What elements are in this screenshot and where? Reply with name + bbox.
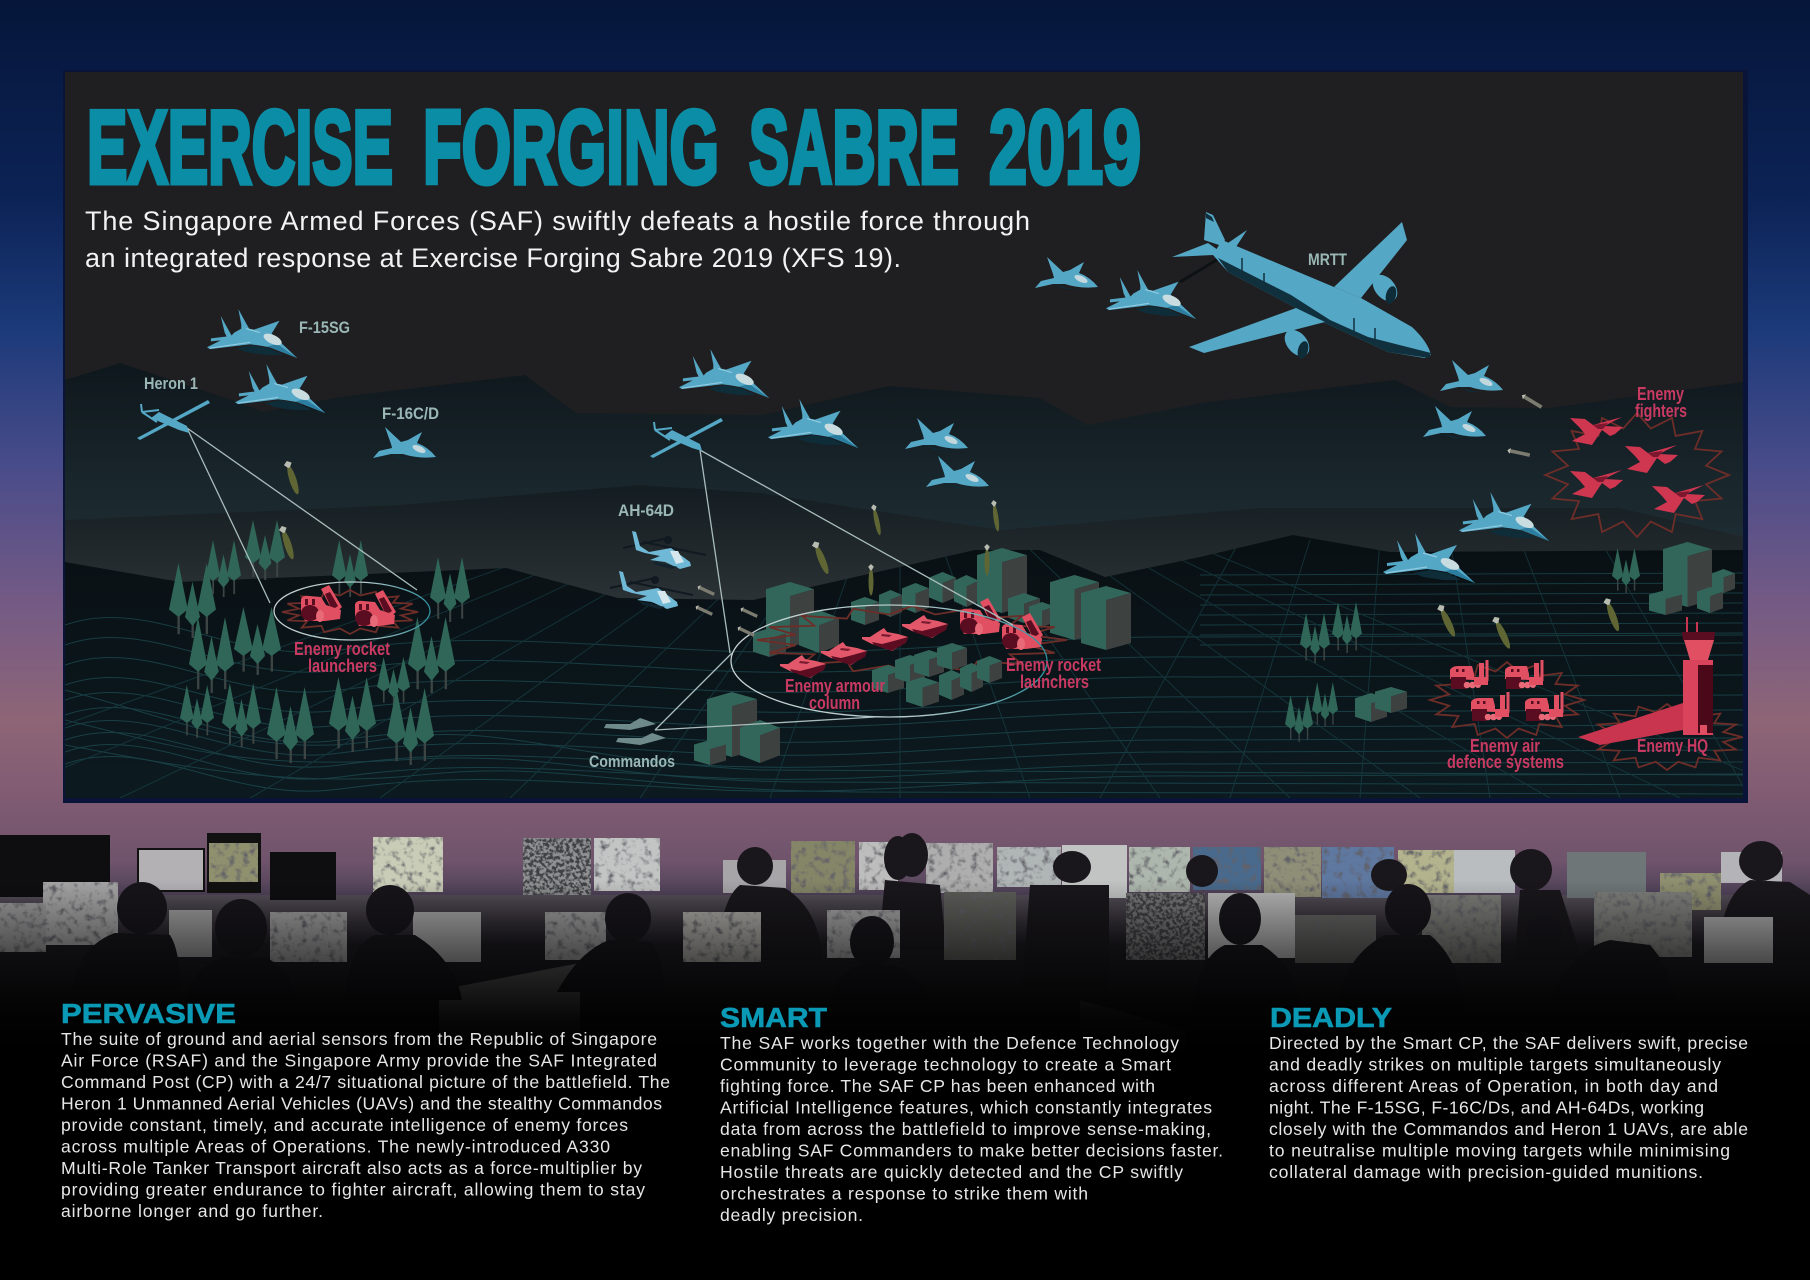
subtitle: The Singapore Armed Forces (SAF) swiftly defeats a hostile force through <box>85 206 1030 236</box>
enemy HQ tower <box>1578 617 1715 745</box>
bombs <box>278 460 1622 650</box>
enemy rocket launchers centre <box>960 598 1043 650</box>
body: SMART: Hostile threats are quickly detected and the CP swiftly <box>720 1162 1183 1182</box>
body: DEADLY: across different Areas of Operation, in both day and <box>1269 1076 1718 1096</box>
burst: enemy fighters <box>1545 413 1729 537</box>
label: enemy HQ: Enemy HQ <box>1637 736 1708 756</box>
F-16C/D fighters <box>373 257 1503 488</box>
label: F-16C/D: F-16C/D <box>382 404 439 423</box>
body: PERVASIVE: Heron 1 Unmanned Aerial Vehicles (UAVs) and the stealthy Commandos <box>61 1094 662 1114</box>
F-15SG fighters <box>207 270 1549 583</box>
subtitle: an integrated response at Exercise Forging Sabre 2019 (XFS 19). <box>85 243 901 273</box>
label: MRTT: MRTT <box>1308 250 1347 269</box>
body: DEADLY: closely with the Commandos and Heron 1 UAVs, are able <box>1269 1119 1748 1139</box>
body: DEADLY: collateral damage with precision-guided munitions. <box>1269 1162 1703 1182</box>
label: enemy rocket launchers centre: launchers <box>1020 672 1089 692</box>
label: enemy fighters: fighters <box>1635 401 1687 421</box>
body: PERVASIVE: Air Force (RSAF) and the Singapore Army provide the SAF Integrated <box>61 1050 657 1070</box>
Heron 1 UAVs <box>137 400 723 458</box>
subtitle <box>85 206 1030 273</box>
label: enemy rocket launchers left <box>294 642 390 672</box>
label: F-15SG: F-15SG <box>299 318 350 337</box>
column: SMART <box>720 1002 1223 1225</box>
MRTT aircraft <box>1172 212 1431 361</box>
title: SABRE <box>749 90 959 206</box>
heading: PERVASIVE: PERVASIVE <box>61 998 236 1029</box>
title: 2019 <box>989 90 1141 206</box>
label: enemy rocket launchers left: launchers <box>308 656 377 676</box>
body: PERVASIVE: The suite of ground and aerial sensors from the Republic of Singapore <box>61 1029 657 1049</box>
burst: left rocket launchers <box>282 590 418 634</box>
label: enemy air defence systems: Enemy air <box>1470 736 1540 756</box>
body: SMART: Community to leverage technology to create a Smart <box>720 1054 1171 1074</box>
body: DEADLY: Directed by the Smart CP, the SAF delivers swift, precise <box>1269 1033 1748 1053</box>
label: Heron 1: Heron 1 <box>144 374 198 393</box>
title: EXERCISE <box>87 90 393 206</box>
label: enemy armour column <box>786 679 885 709</box>
body: SMART: deadly precision. <box>720 1205 863 1225</box>
burst: HQ <box>1592 704 1742 770</box>
commandos <box>604 718 666 745</box>
terrain grid <box>0 540 1810 798</box>
enemy armour column <box>780 615 948 678</box>
label: enemy fighters <box>1635 384 1687 421</box>
buildings near commandos <box>694 692 780 765</box>
body: SMART: fighting force. The SAF CP has been enhanced with <box>720 1076 1155 1096</box>
body: SMART: Artificial Intelligence features, which constantly integrates <box>720 1098 1212 1118</box>
label: Commandos: Commandos <box>589 752 675 771</box>
body: SMART: orchestrates a response to strike them with <box>720 1184 1088 1204</box>
target ellipses and sensor lines <box>187 428 1047 730</box>
heading: DEADLY: DEADLY <box>1270 1002 1392 1033</box>
missiles <box>694 393 1543 638</box>
column: PERVASIVE <box>61 998 670 1221</box>
heading: SMART: SMART <box>720 1002 827 1033</box>
body: PERVASIVE: Command Post (CP) with a 24/7 situational picture of the battlefield. The <box>61 1072 670 1092</box>
upper row of monitors <box>0 833 1782 910</box>
label: enemy armour column: Enemy armour <box>785 676 885 696</box>
body: DEADLY: night. The F-15SG, F-16C/Ds, and AH-64Ds, working <box>1269 1098 1704 1118</box>
body: PERVASIVE: provide constant, timely, and accurate intelligence of enemy forces <box>61 1115 628 1135</box>
buildings centre front <box>872 643 1002 707</box>
label: enemy rocket launchers centre <box>1006 655 1101 692</box>
operator silhouettes back row <box>718 833 1810 990</box>
title: FORGING <box>423 90 719 206</box>
body: SMART <box>720 1033 1223 1225</box>
body: PERVASIVE: across multiple Areas of Operations. The newly-introduced A330 <box>61 1136 610 1156</box>
trees right <box>1285 548 1640 742</box>
label: enemy fighters: Enemy <box>1637 384 1684 404</box>
body: PERVASIVE: Multi-Role Tanker Transport aircraft also acts as a force-multiplier by <box>61 1158 642 1178</box>
lower row of monitors <box>0 882 1773 1050</box>
buildings right <box>1355 542 1735 722</box>
panel shadow <box>63 70 1748 803</box>
photo: command post operators at monitors <box>0 833 1810 1280</box>
ground <box>65 535 1743 798</box>
body: SMART: enabling SAF Commanders to make better decisions faster. <box>720 1140 1223 1160</box>
buildings centre back <box>753 548 1131 657</box>
label: enemy air defence systems: defence systems <box>1447 752 1564 772</box>
body: PERVASIVE: providing greater endurance to fighter aircraft, allowing them to stay <box>61 1180 645 1200</box>
body: PERVASIVE <box>61 1029 670 1221</box>
label: enemy air defence systems <box>1447 736 1564 772</box>
trees left forest <box>169 520 470 765</box>
burst: air defence systems <box>1430 662 1584 738</box>
label: enemy armour column: column <box>809 693 860 713</box>
mountains middle <box>65 485 1743 600</box>
operator silhouettes front row <box>72 882 1675 1010</box>
panel: battlefield scene <box>0 72 1810 798</box>
fade to black <box>0 880 1810 1280</box>
label: enemy rocket launchers left: Enemy rocket <box>294 639 390 659</box>
body: SMART: The SAF works together with the Defence Technology <box>720 1033 1179 1053</box>
back wall band <box>0 895 1810 1045</box>
body: DEADLY: and deadly strikes on multiple targets simultaneously <box>1269 1054 1721 1074</box>
body: PERVASIVE: airborne longer and go further. <box>61 1201 323 1221</box>
column: DEADLY <box>1269 1002 1748 1182</box>
title <box>87 90 1141 206</box>
enemy air defence systems <box>1450 660 1564 721</box>
enemy rocket launchers left <box>301 585 396 627</box>
sky <box>65 72 1743 425</box>
AH-64D helicopters <box>610 531 706 609</box>
body: DEADLY: to neutralise multiple moving targets while minimising <box>1269 1140 1730 1160</box>
mountains far <box>65 363 1743 537</box>
body: DEADLY <box>1269 1033 1748 1182</box>
label: enemy rocket launchers centre: Enemy rocket <box>1006 655 1101 675</box>
enemy fighters <box>1570 417 1705 513</box>
burst: armour column <box>757 606 1067 674</box>
label: AH-64D: AH-64D <box>618 501 674 520</box>
body: SMART: data from across the battlefield to improve sense-making, <box>720 1119 1211 1139</box>
